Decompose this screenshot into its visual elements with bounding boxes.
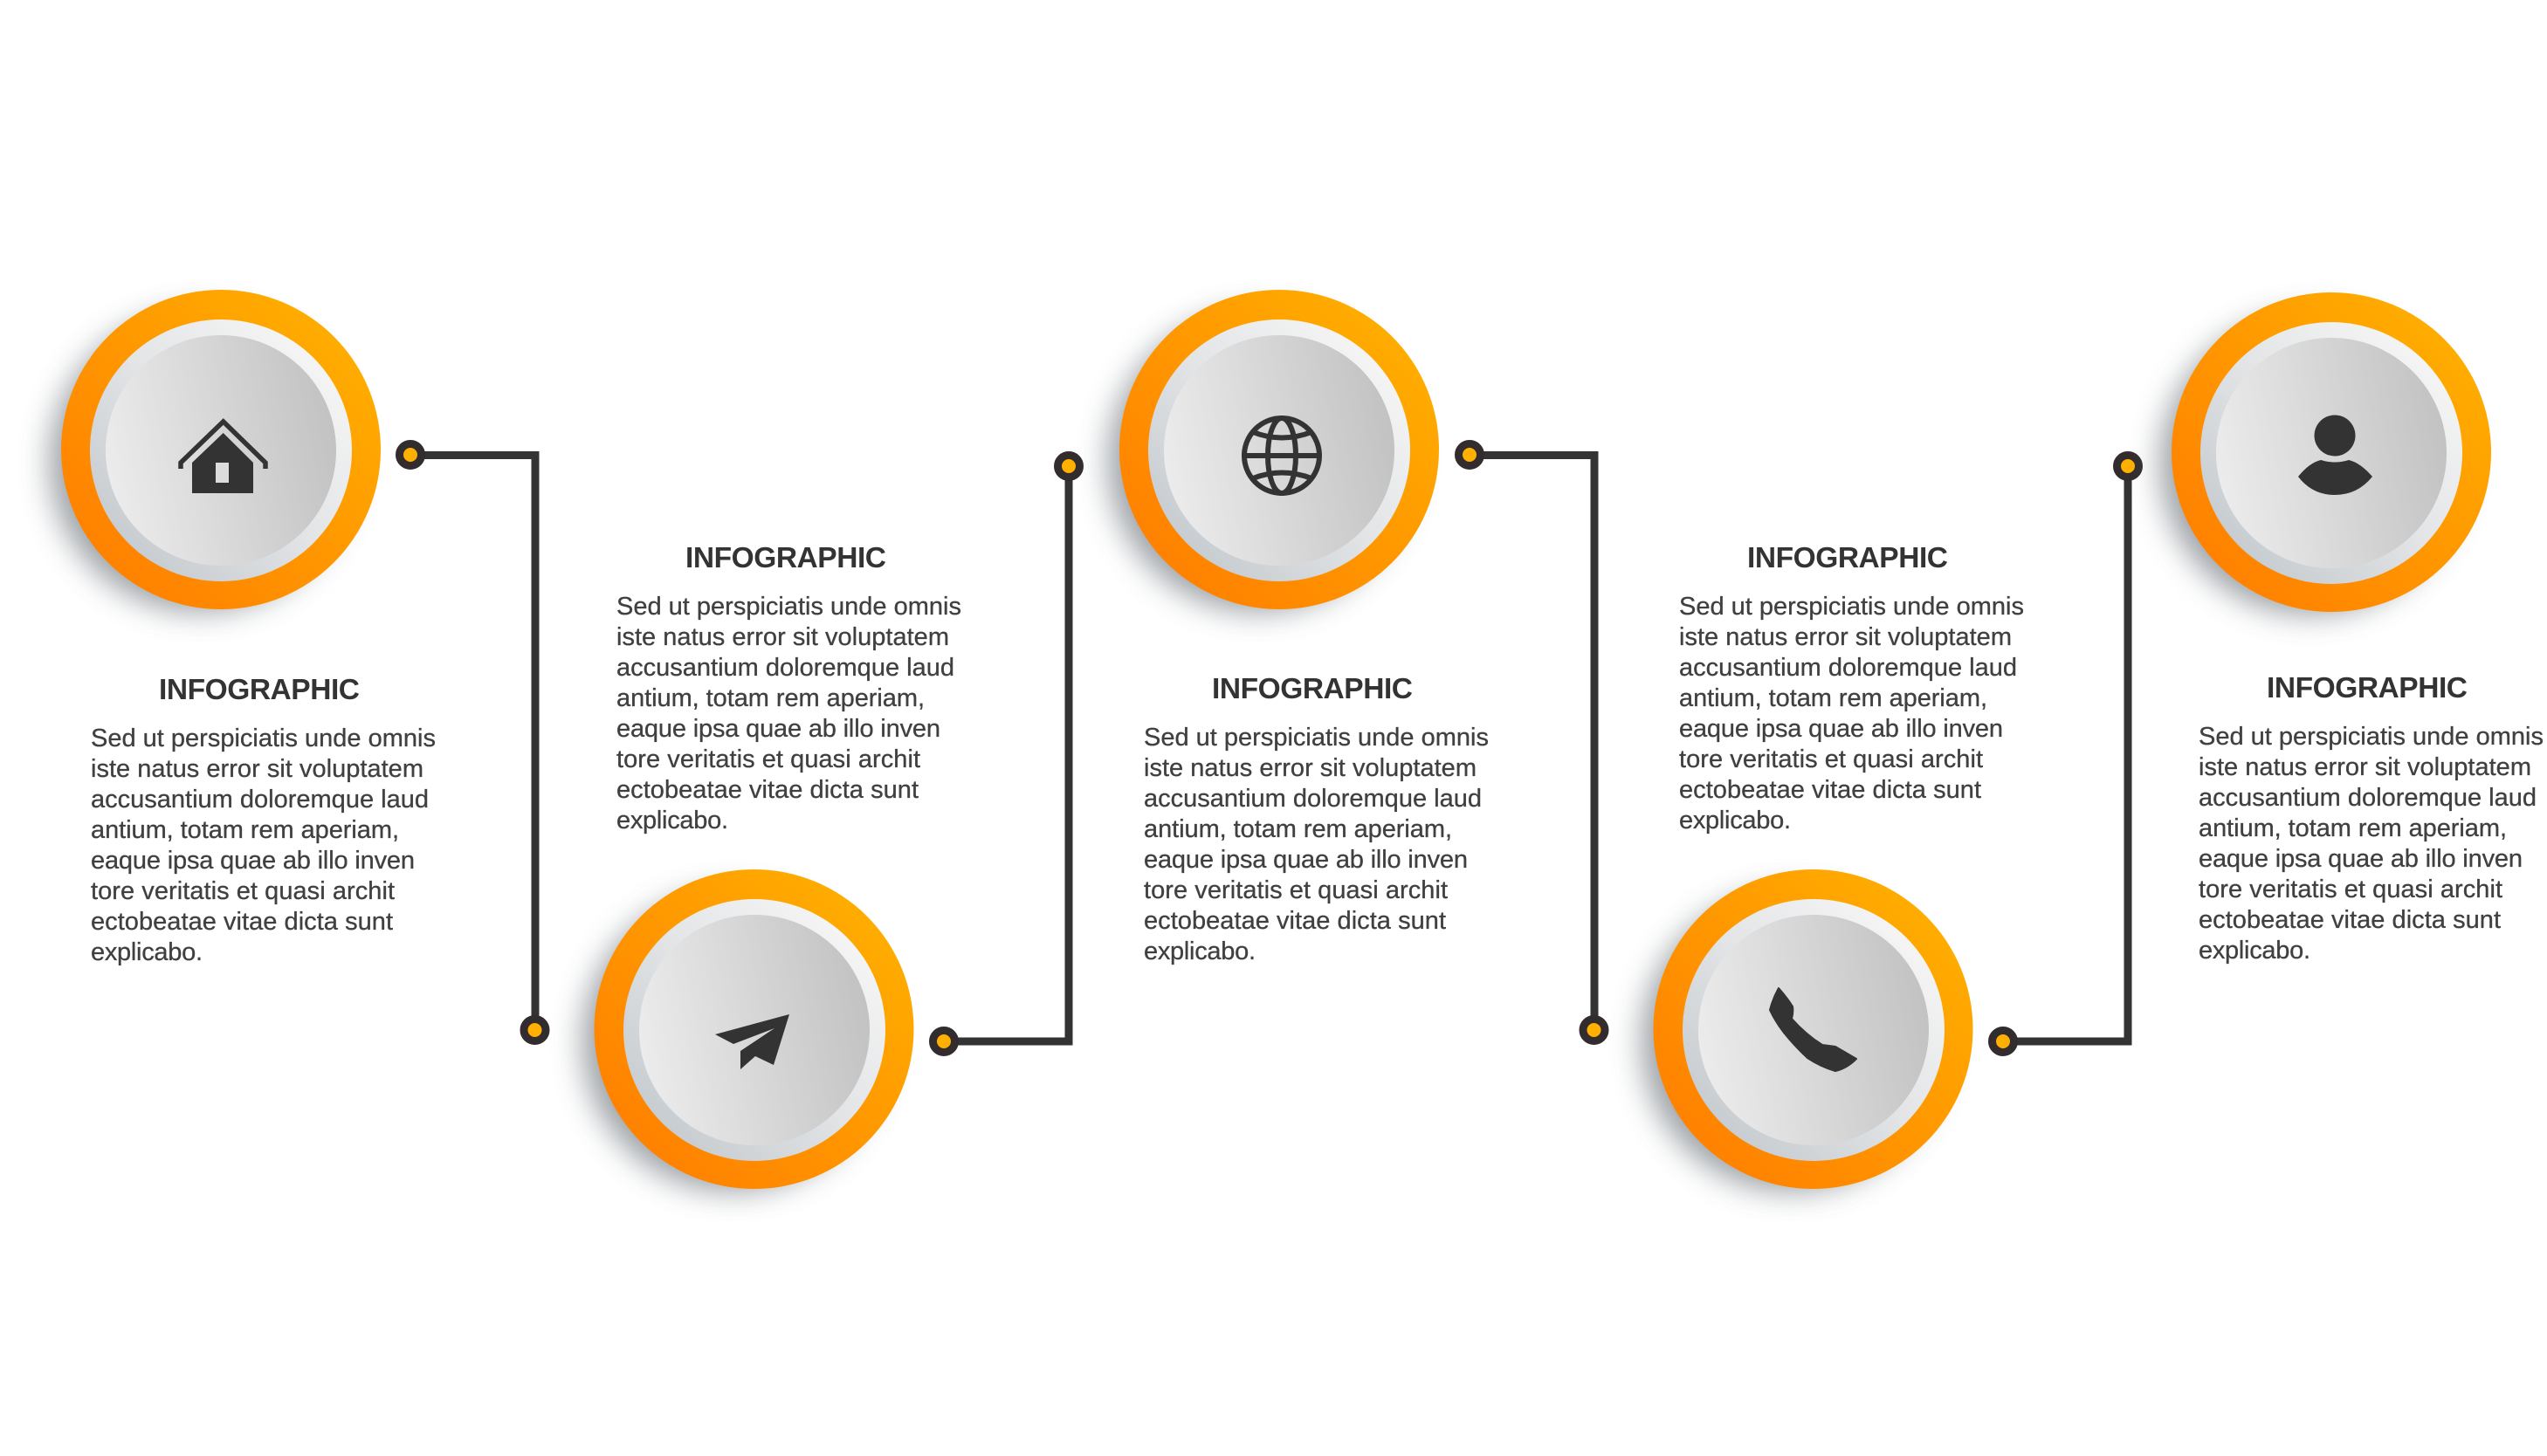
body text 4: ectobeatae vitae dicta sunt <box>1679 776 1981 804</box>
body text 5: accusantium doloremque laud <box>2199 784 2537 812</box>
body text 2: eaque ipsa quae ab illo inven <box>616 715 940 743</box>
body text 3 <box>1144 724 1489 965</box>
heading 4: INFOGRAPHIC <box>1747 542 1948 574</box>
circle badge 3: globe <box>1108 290 1439 612</box>
body text 2: accusantium doloremque laud <box>616 654 954 682</box>
body text 2: Sed ut perspiciatis unde omnis <box>616 593 961 621</box>
body text 2 <box>616 593 961 834</box>
body text 1: tore veritatis et quasi archit <box>91 877 395 905</box>
body text 4: explicabo. <box>1679 807 1791 834</box>
body text 4 <box>1679 593 2024 834</box>
body text 2: ectobeatae vitae dicta sunt <box>616 776 919 804</box>
body text 4: antium, totam rem aperiam, <box>1679 684 1987 712</box>
connector 3 <box>1458 443 1605 1040</box>
body text 1: explicabo. <box>91 938 203 966</box>
body text 3: antium, totam rem aperiam, <box>1144 815 1452 843</box>
body text 5: iste natus error sit voluptatem <box>2199 753 2531 781</box>
body text 5: explicabo. <box>2199 937 2310 965</box>
body text 5: ectobeatae vitae dicta sunt <box>2199 906 2501 934</box>
body text 1: ectobeatae vitae dicta sunt <box>91 908 393 936</box>
body text 3: eaque ipsa quae ab illo inven <box>1144 846 1468 874</box>
icon: globe <box>1244 418 1319 493</box>
body text 3: iste natus error sit voluptatem <box>1144 754 1477 782</box>
body text 5: antium, totam rem aperiam, <box>2199 814 2507 842</box>
circle badge 1: home <box>50 290 381 612</box>
text block 1 <box>91 674 436 966</box>
body text 4: Sed ut perspiciatis unde omnis <box>1679 593 2024 621</box>
heading 2: INFOGRAPHIC <box>685 542 886 574</box>
icon: person <box>2298 416 2372 495</box>
heading 5: INFOGRAPHIC <box>2267 672 2468 704</box>
heading 1: INFOGRAPHIC <box>159 674 360 706</box>
heading 3: INFOGRAPHIC <box>1212 673 1413 705</box>
icon: paper plane <box>715 1014 789 1069</box>
text block 3 <box>1144 673 1489 965</box>
body text 3: accusantium doloremque laud <box>1144 785 1482 813</box>
body text 2: antium, totam rem aperiam, <box>616 684 925 712</box>
text block 2 <box>616 542 961 834</box>
body text 3: explicabo. <box>1144 937 1256 965</box>
connector 4 <box>1993 456 2139 1053</box>
body text 1: accusantium doloremque laud <box>91 786 429 814</box>
body text 2: iste natus error sit voluptatem <box>616 623 949 651</box>
connector 2 <box>933 456 1079 1053</box>
body text 1: iste natus error sit voluptatem <box>91 755 423 783</box>
icon: phone handset <box>1770 988 1856 1071</box>
body text 3: Sed ut perspiciatis unde omnis <box>1144 724 1489 752</box>
circle badge 5: person <box>2160 292 2491 615</box>
body text 3: tore veritatis et quasi archit <box>1144 876 1448 904</box>
body text 1 <box>91 725 436 966</box>
body text 1: Sed ut perspiciatis unde omnis <box>91 725 436 752</box>
body text 4: eaque ipsa quae ab illo inven <box>1679 715 2003 743</box>
text block 4 <box>1679 542 2024 834</box>
body text 1: antium, totam rem aperiam, <box>91 816 399 844</box>
circle badge 2: paper plane <box>582 869 913 1192</box>
icon: house <box>181 422 265 493</box>
body text 3: ectobeatae vitae dicta sunt <box>1144 907 1446 935</box>
body text 2: explicabo. <box>616 807 728 834</box>
text block 5 <box>2199 672 2544 965</box>
body text 4: iste natus error sit voluptatem <box>1679 623 2012 651</box>
body text 5: Sed ut perspiciatis unde omnis <box>2199 723 2544 751</box>
body text 4: accusantium doloremque laud <box>1679 654 2017 682</box>
body text 4: tore veritatis et quasi archit <box>1679 745 1983 773</box>
body text 1: eaque ipsa quae ab illo inven <box>91 847 415 875</box>
body text 5: eaque ipsa quae ab illo inven <box>2199 845 2523 873</box>
circle badge 4: phone <box>1642 869 1973 1192</box>
body text 5: tore veritatis et quasi archit <box>2199 876 2502 903</box>
body text 2: tore veritatis et quasi archit <box>616 745 920 773</box>
connector 1 <box>400 443 546 1040</box>
body text 5 <box>2199 723 2544 965</box>
